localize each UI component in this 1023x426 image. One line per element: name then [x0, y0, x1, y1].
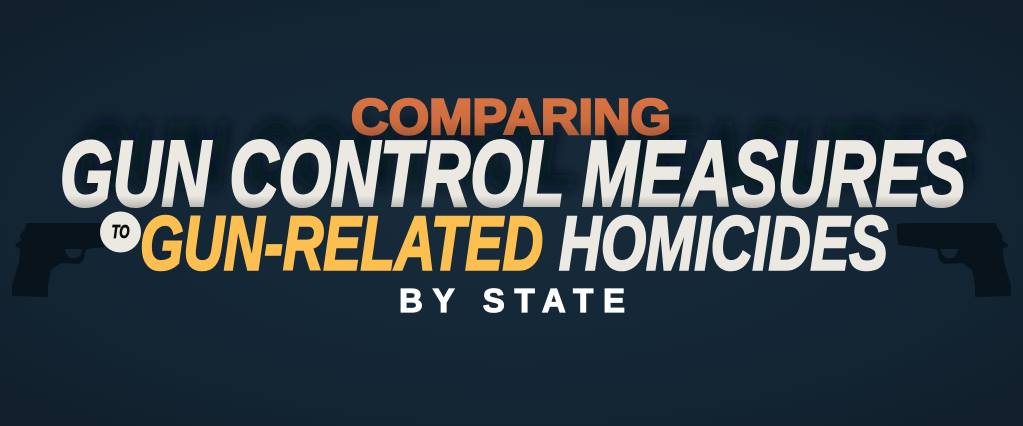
heading: comparing: COMPARING — [351, 89, 671, 145]
heading: gun-related: GUN-RELATED — [140, 202, 543, 287]
heading: homicides: HOMICIDES — [559, 202, 888, 287]
icon: right pistol — [897, 223, 1011, 297]
badge: to: TO — [112, 222, 130, 242]
icon: left pistol — [12, 223, 126, 297]
badge: to — [100, 212, 141, 252]
heading: by state: BY STATE — [399, 282, 625, 319]
